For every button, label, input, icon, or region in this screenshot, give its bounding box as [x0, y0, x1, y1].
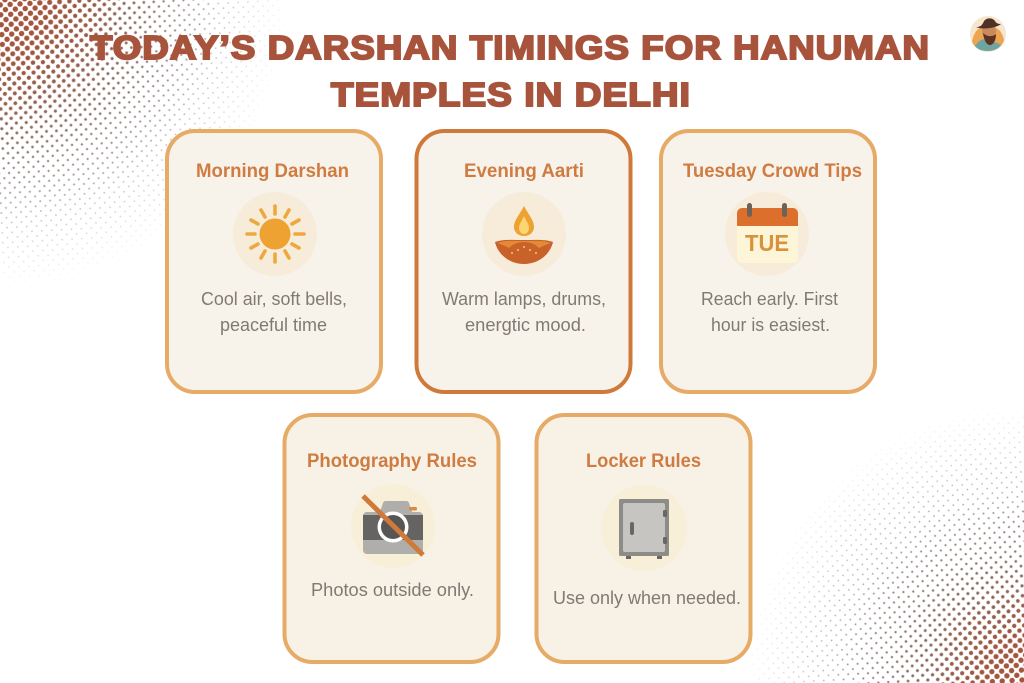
text: morning description [201, 289, 347, 335]
title: TEMPLES IN DELHI [331, 76, 691, 113]
text: locker description: Use only when needed. [553, 588, 741, 608]
text: evening description: Warm lamps, drums, [442, 289, 606, 309]
heading: Evening Aarti: Evening Aarti [464, 161, 584, 182]
panel: Photography Rules [284, 415, 498, 662]
icon: calendar TUE [725, 192, 809, 276]
heading: Morning Darshan: Morning Darshan [196, 161, 349, 182]
title [90, 29, 930, 113]
heading: Locker Rules: Locker Rules [586, 451, 701, 472]
panel: Evening Aarti [416, 131, 630, 392]
text: evening description [442, 289, 606, 335]
text: tuesday description [701, 289, 838, 335]
text: photography description: Photos outside only. [311, 580, 474, 600]
icon: diya lamp [482, 192, 566, 276]
text: evening description: energtic mood. [465, 315, 586, 335]
icon: no camera [351, 484, 435, 568]
text: tuesday description: hour is easiest. [711, 315, 830, 335]
text: morning description: Cool air, soft bells, [201, 289, 347, 309]
icon: locker safe [601, 485, 687, 571]
panel: Locker Rules [536, 415, 750, 662]
text: tuesday description: Reach early. First [701, 289, 838, 309]
text: morning description: peaceful time [220, 315, 327, 335]
halftone: bottom-right corner [744, 403, 1024, 683]
panel: Morning Darshan [167, 131, 381, 392]
heading: Tuesday Crowd Tips: Tuesday Crowd Tips [683, 161, 862, 182]
title: TODAY’S DARSHAN TIMINGS FOR HANUMAN [90, 29, 930, 66]
halftone: top-left corner [0, 0, 290, 290]
icon: sun [233, 192, 317, 276]
logo avatar [970, 16, 1006, 52]
icon: calendar TUE: TUE [745, 230, 789, 256]
heading: Photography Rules: Photography Rules [307, 451, 477, 472]
panel: Tuesday Crowd Tips [661, 131, 875, 392]
